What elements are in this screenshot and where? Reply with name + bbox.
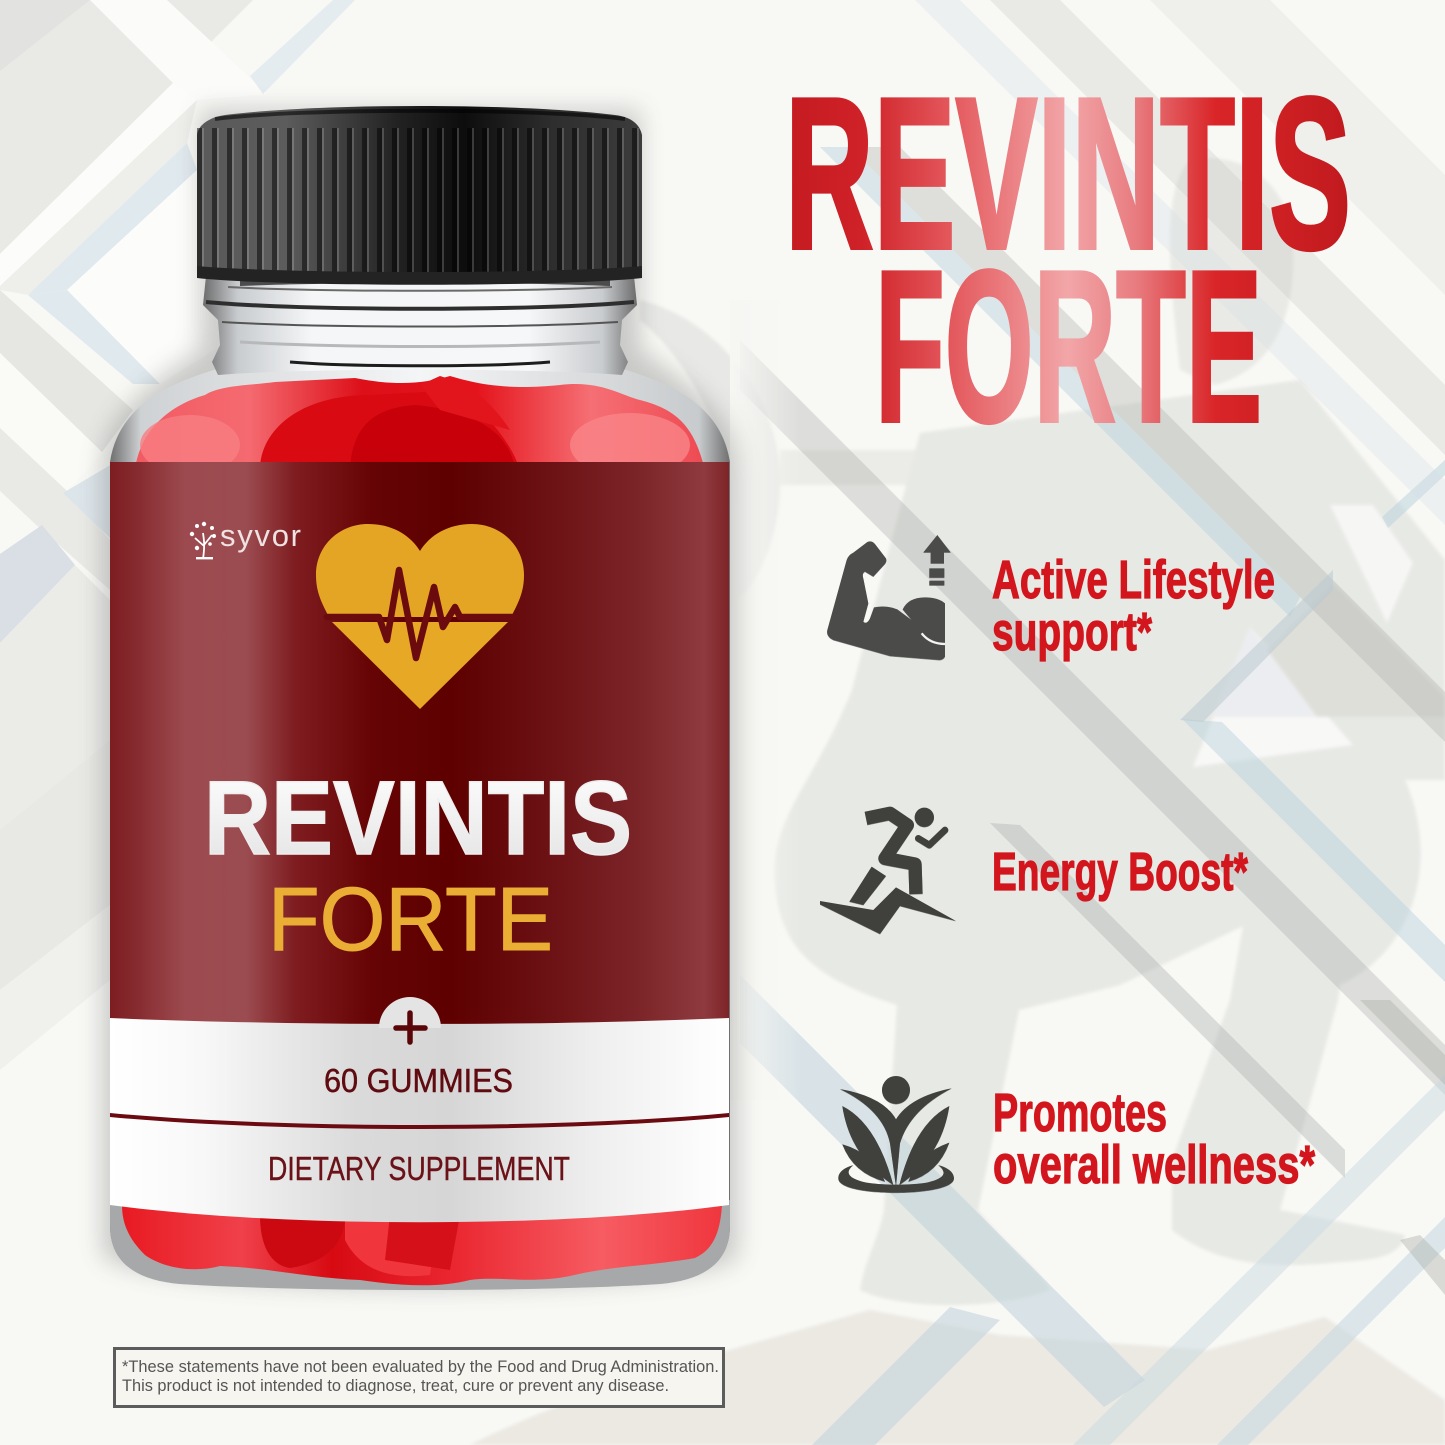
benefit: active lifestyle: Active Lifestyle	[992, 550, 1275, 610]
benefit: overall wellness	[993, 1083, 1315, 1195]
title	[785, 52, 1351, 467]
count: 60 GUMMIES	[324, 1062, 513, 1099]
background: overlay diagonal bands	[740, 0, 1445, 1445]
plus badge	[379, 997, 441, 1042]
benefit: active lifestyle: support*	[992, 602, 1152, 662]
brand logo: syvor: syvor	[220, 518, 301, 553]
product subname: FORTE	[268, 870, 553, 970]
icon: wellness figure	[838, 1076, 954, 1193]
background: floor	[470, 1310, 1445, 1445]
gummies: bottom layer	[122, 1205, 722, 1285]
product bottle	[100, 106, 740, 1300]
benefit: active lifestyle	[992, 550, 1275, 662]
background: faded athlete silhouette	[640, 158, 1445, 1305]
disclaimer box	[114, 1348, 724, 1406]
cap	[197, 106, 642, 281]
bottle shadow	[102, 110, 738, 1288]
glass body	[110, 368, 730, 1290]
disclaimer box: *These statements have not been evaluated by the Food and Drug Administration.	[122, 1357, 719, 1376]
disclaimer box: This product is not intended to diagnose, treat, cure or prevent any disease.	[122, 1376, 669, 1395]
benefit: energy boost: Energy Boost*	[992, 842, 1248, 902]
heart logo	[316, 524, 524, 709]
neck	[203, 276, 637, 375]
icon: running figure	[820, 808, 956, 934]
icon: flexed arm with up arrow	[827, 535, 951, 660]
benefit: overall wellness: overall wellness*	[993, 1135, 1315, 1195]
product name: REVINTIS	[204, 760, 632, 877]
label	[110, 462, 729, 1032]
gummies: top layer	[100, 376, 740, 1300]
brand logo: syvor	[190, 518, 301, 559]
benefit: overall wellness: Promotes	[993, 1083, 1167, 1143]
supplement type: DIETARY SUPPLEMENT	[268, 1150, 570, 1187]
